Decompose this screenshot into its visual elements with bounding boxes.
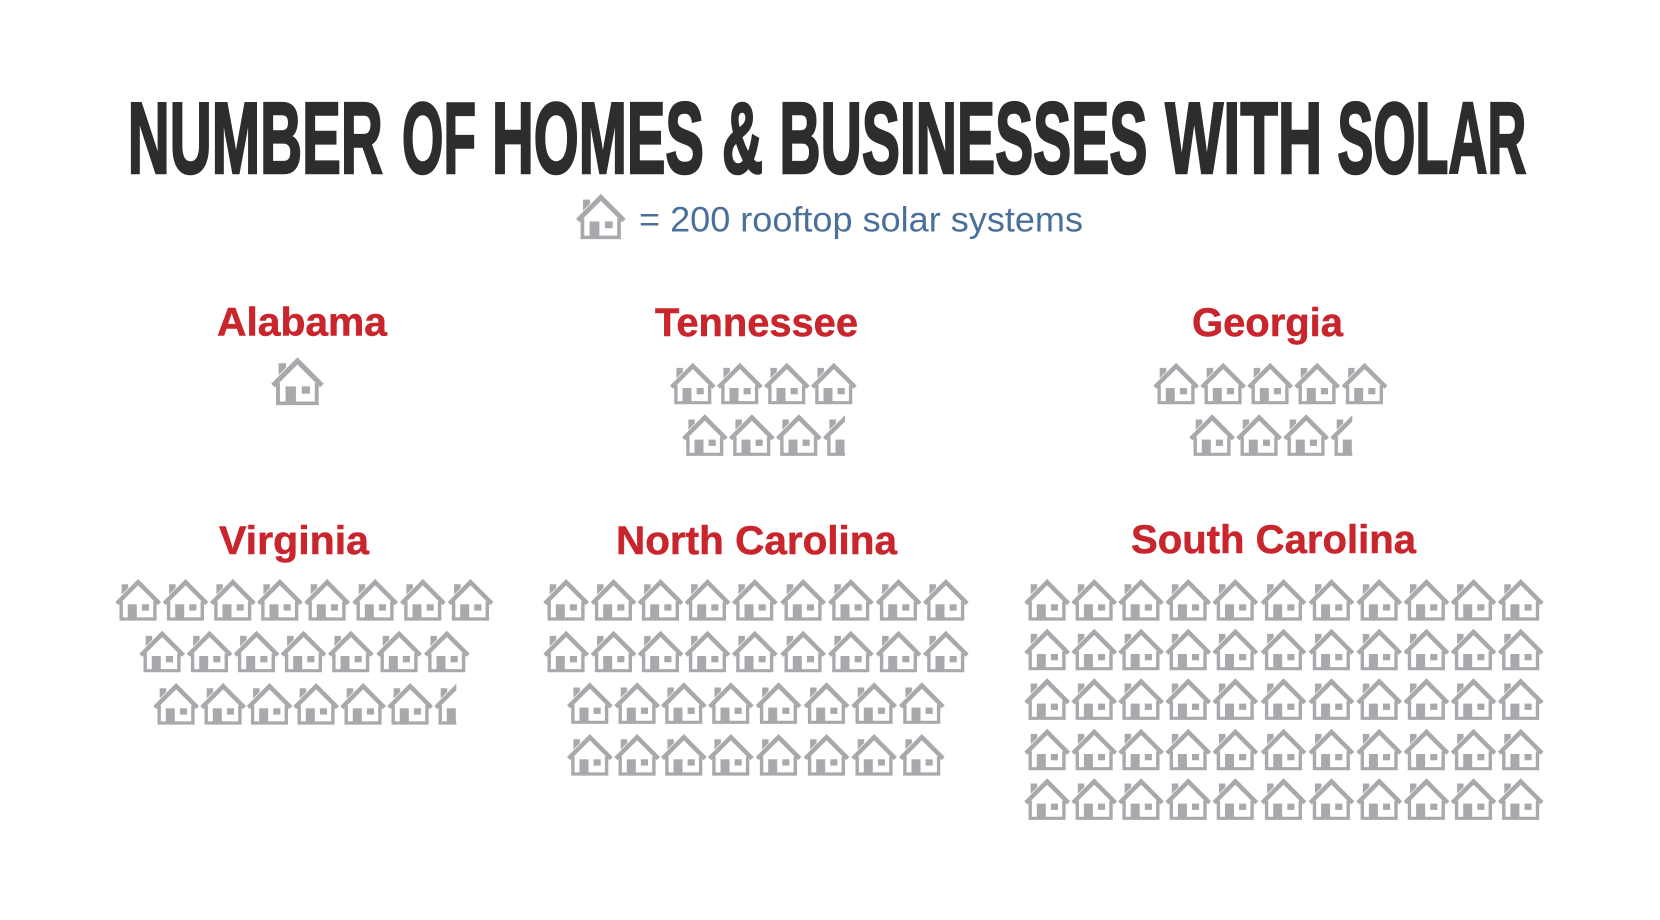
- heading: Alabama: Alabama: [217, 300, 388, 344]
- heading: Virginia: Virginia: [219, 519, 370, 563]
- house icons: Tennessee: [670, 363, 869, 456]
- icon: house: [271, 357, 324, 405]
- house icons: North Carolina: [543, 579, 969, 776]
- title: [128, 83, 1526, 195]
- panel: South Carolina: [1024, 518, 1544, 820]
- title: WITH: [1165, 83, 1322, 195]
- title: NUMBER: [128, 83, 383, 195]
- panel: Alabama: [217, 300, 388, 405]
- legend: [576, 194, 1083, 240]
- panel: Virginia: [115, 519, 493, 725]
- house icons: South Carolina: [1024, 579, 1544, 820]
- panel: North Carolina: [543, 519, 969, 776]
- title: HOMES: [492, 83, 704, 195]
- heading: North Carolina: North Carolina: [616, 519, 898, 563]
- title: OF: [402, 83, 476, 195]
- legend text: = 200 rooftop solar systems: [639, 201, 1083, 240]
- panel: Georgia: [1153, 301, 1387, 456]
- house icons: Virginia: [115, 579, 493, 725]
- heading: Tennessee: Tennessee: [655, 301, 858, 345]
- heading: South Carolina: South Carolina: [1131, 518, 1417, 562]
- panel: Tennessee: [655, 301, 869, 456]
- house icons: Georgia: [1153, 363, 1387, 456]
- title: &: [722, 83, 763, 195]
- title: BUSINESSES: [779, 83, 1147, 195]
- icon: house legend: [576, 194, 626, 239]
- heading: Georgia: Georgia: [1192, 301, 1344, 345]
